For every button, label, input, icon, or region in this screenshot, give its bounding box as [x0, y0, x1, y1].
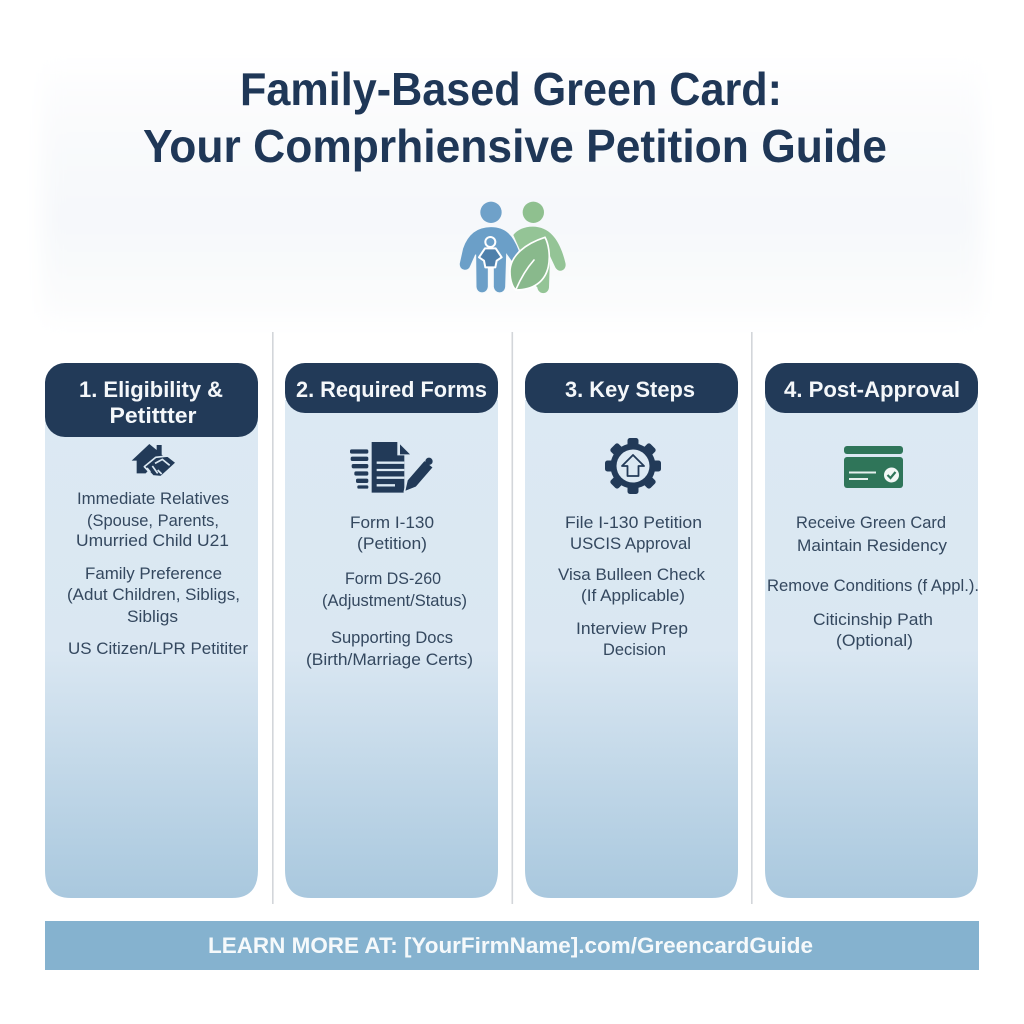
text: steps list: Interview Prep	[576, 620, 688, 638]
panel header: Petittter	[110, 403, 197, 428]
icon: house and handshake	[132, 444, 176, 477]
text: steps list: File I-130 Petition	[565, 514, 702, 532]
text: eligibility list: US Citizen/LPR Petititer	[68, 640, 249, 658]
text: steps list	[558, 514, 706, 659]
panel body	[765, 400, 978, 898]
footer banner	[45, 921, 979, 970]
panel header	[45, 363, 258, 437]
panel header: 3. Key Steps	[565, 377, 695, 402]
title: Your Comprhiensive Petition Guide	[143, 120, 887, 172]
text: steps list: USCIS Approval	[570, 535, 691, 553]
panel header: 1. Eligibility &	[79, 377, 223, 402]
text: eligibility list: Immediate Relatives	[77, 490, 229, 508]
text: eligibility list: (Spouse, Parents,	[87, 512, 219, 530]
icon: documents and pen	[350, 442, 434, 493]
panel header: 4. Post-Approval	[784, 377, 960, 402]
text: forms list: (Adjustment/Status)	[322, 592, 467, 610]
text: forms list: (Petition)	[357, 535, 427, 553]
text: post-approval list: (Optional)	[836, 632, 913, 650]
text: post-approval list	[767, 514, 979, 650]
text: eligibility list	[67, 490, 249, 658]
text: forms list: Supporting Docs	[331, 629, 453, 647]
panel header	[525, 363, 738, 413]
text: eligibility list: Sibligs	[127, 608, 178, 626]
panel: post-approval	[765, 363, 979, 898]
text: steps list: Visa Bulleen Check	[558, 566, 706, 584]
icon: gear with arrow	[605, 438, 661, 494]
panel header	[285, 363, 498, 413]
panel body	[285, 400, 498, 898]
text: forms list: Form I-130	[350, 514, 434, 532]
text: post-approval list: Receive Green Card	[796, 514, 946, 532]
text: post-approval list: Citicinship Path	[813, 611, 933, 629]
text: steps list: (If Applicable)	[581, 587, 685, 605]
text: post-approval list: Remove Conditions (f Appl.).	[767, 577, 979, 595]
panel body	[525, 400, 738, 898]
text: forms list	[306, 514, 473, 669]
icon: family with child and leaf	[459, 202, 566, 293]
text: steps list: Decision	[603, 641, 666, 659]
panel header: 2. Required Forms	[296, 377, 487, 402]
text: eligibility list: Umurried Child U21	[76, 532, 229, 550]
panel: key steps	[525, 363, 738, 898]
panel: eligibility	[45, 363, 258, 898]
panel body	[45, 400, 258, 898]
text: forms list: Form DS-260	[345, 570, 441, 588]
text: post-approval list: Maintain Residency	[797, 537, 948, 555]
panel: required forms	[285, 363, 498, 898]
text: forms list: (Birth/Marriage Certs)	[306, 651, 473, 669]
footer banner: LEARN MORE AT: [YourFirmName].com/GreencardGuide	[208, 933, 813, 958]
title: Family-Based Green Card:	[240, 63, 782, 115]
text: eligibility list: Family Preference	[85, 565, 222, 583]
title	[143, 63, 887, 172]
icon: green card with check	[844, 446, 903, 488]
text: eligibility list: (Adut Children, Sibligs,	[67, 586, 240, 604]
panel header	[765, 363, 978, 413]
